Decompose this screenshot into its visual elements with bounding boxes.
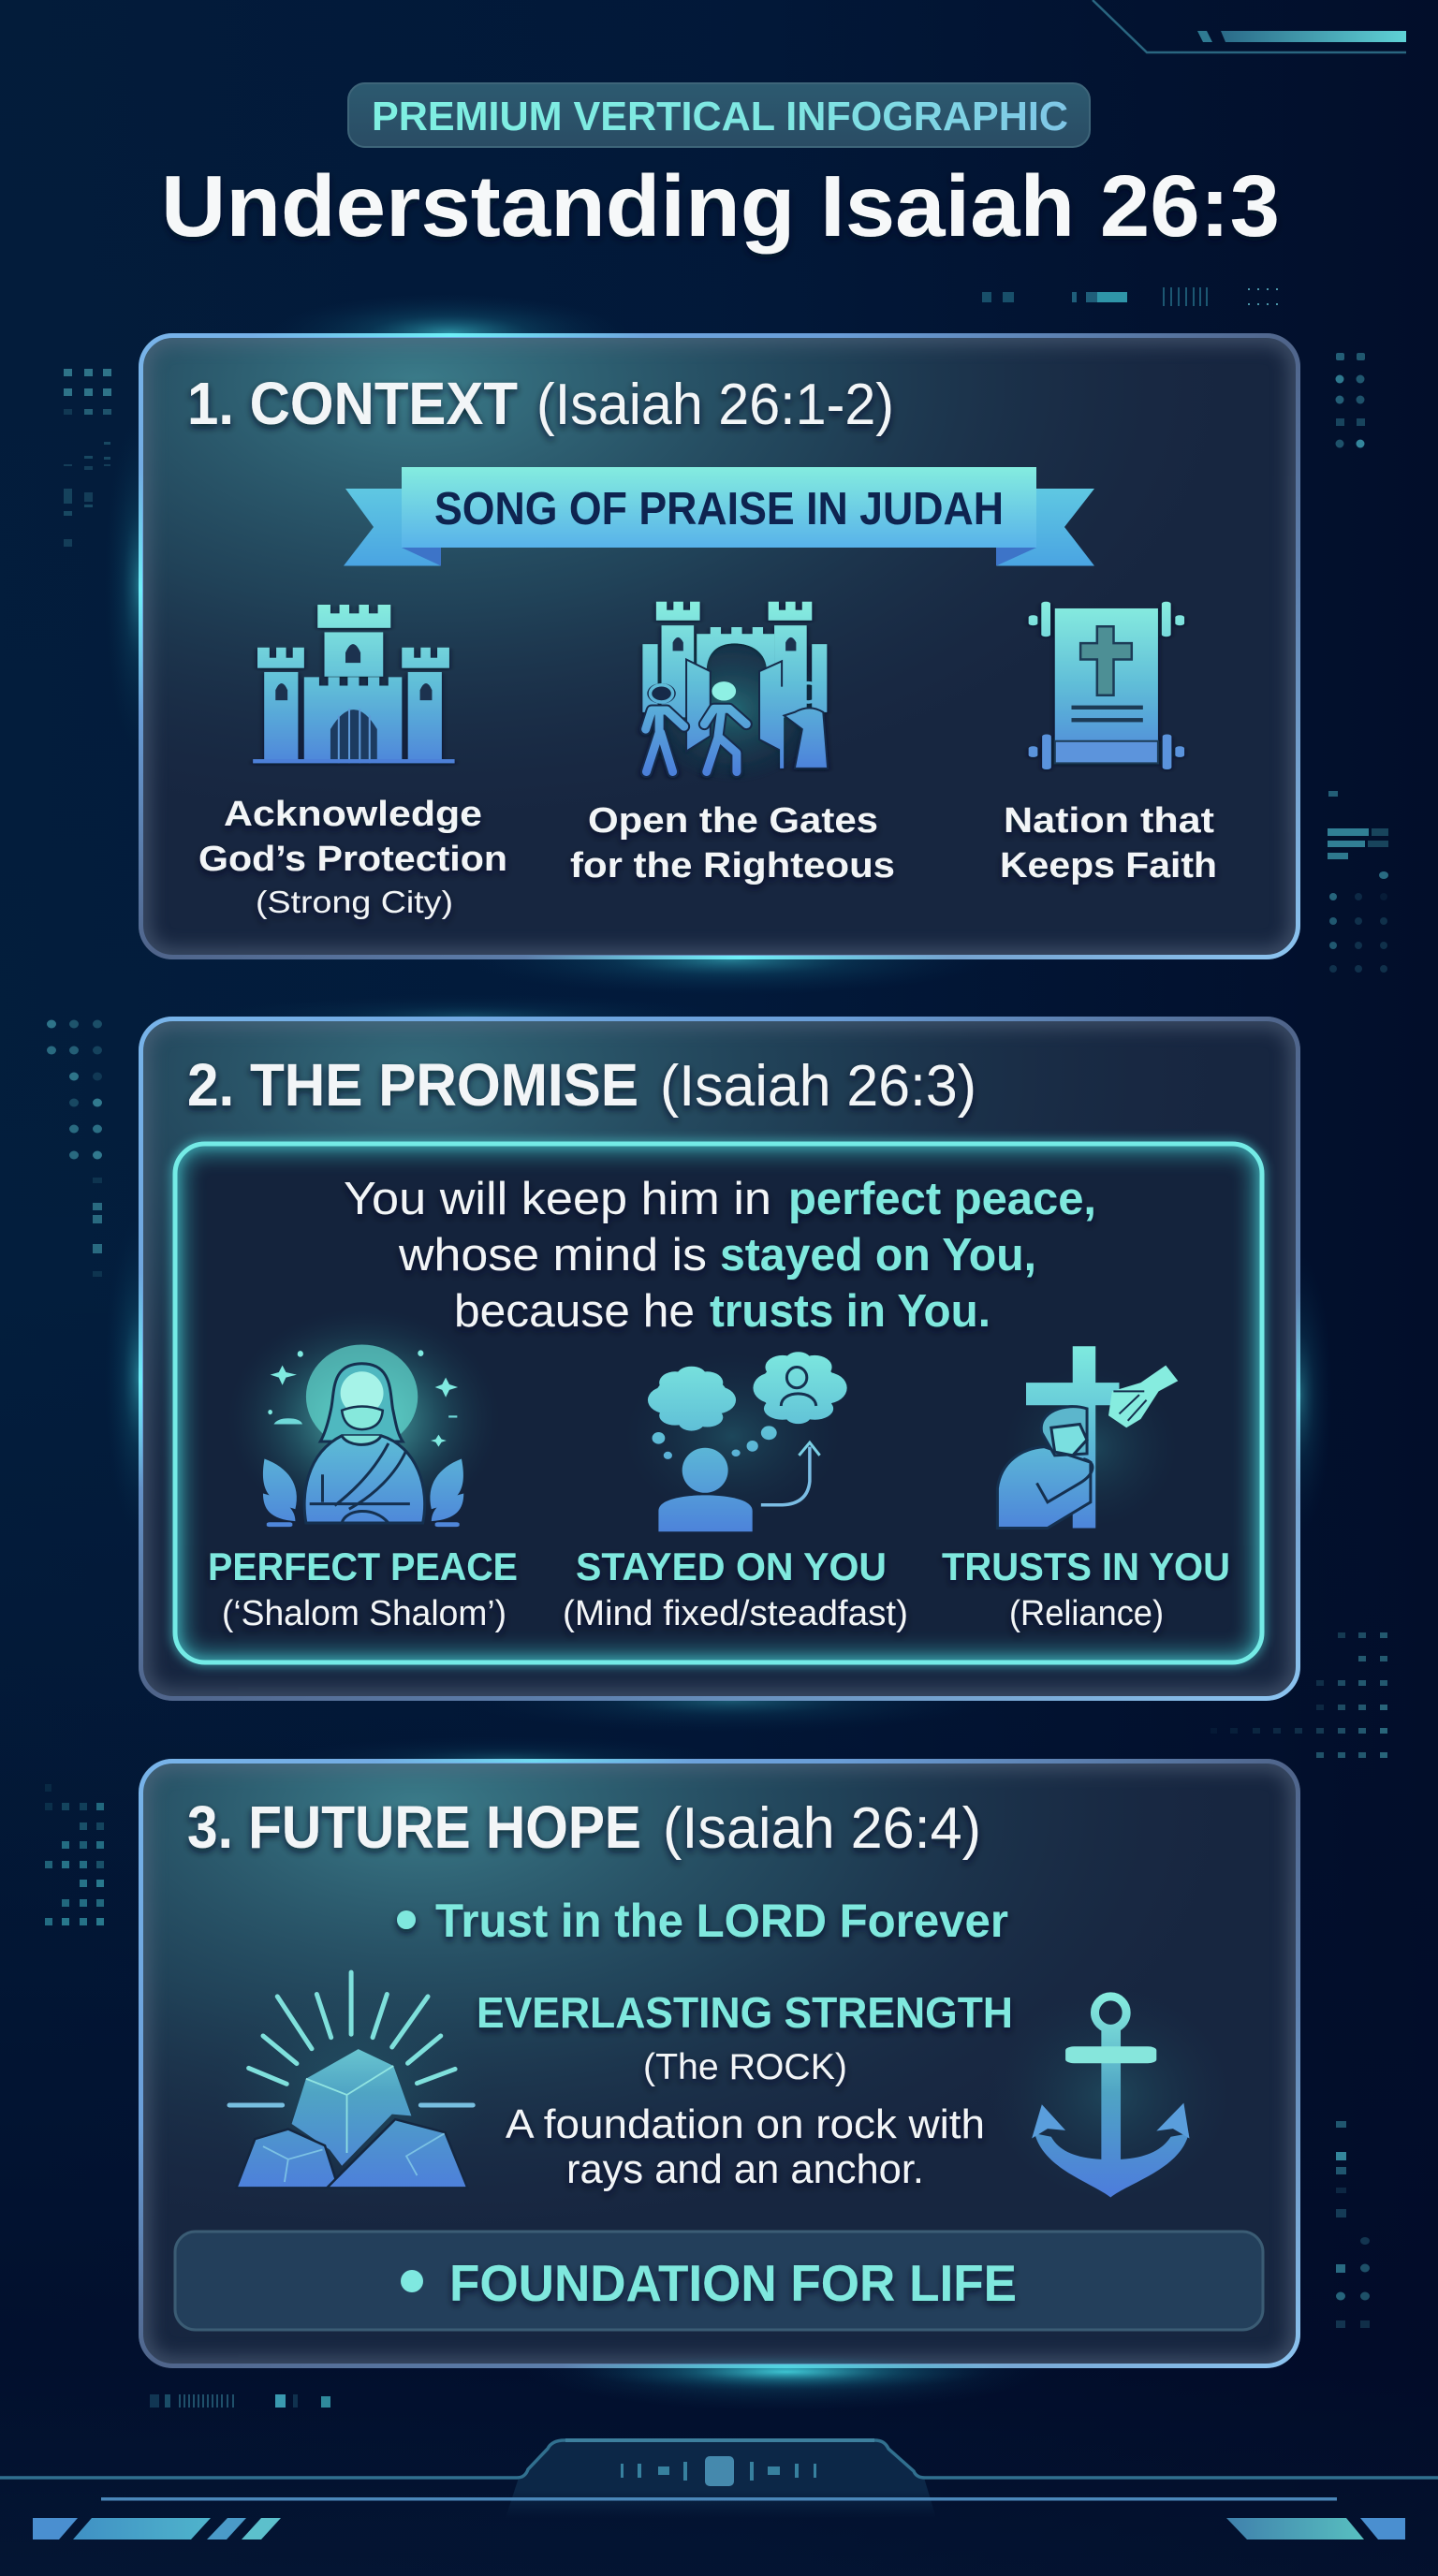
panel: 1. context [139,333,1300,959]
right lower dot grid decoration [1211,1632,1387,1758]
bullet: trust in the lord forever: Trust in the LORD Forever [435,1895,1008,1947]
labels: trusts in you: TRUSTS IN YOU [942,1544,1230,1588]
labels: perfect peace: PERFECT PEACE [208,1544,518,1588]
label: acknowledge gods protection: Acknowledge [224,795,482,834]
icon: scroll with cross [1029,602,1184,769]
icon: trusts in you praying at cross [997,1346,1178,1529]
label: nation that keeps faith: Keeps Faith [1000,846,1217,886]
right top dot decoration [1335,353,1365,447]
foundation for life bar [175,2232,1263,2330]
label: acknowledge gods protection [198,795,507,919]
icon: jesus perfect peace [227,1309,500,1530]
heading: 1. context [187,370,894,437]
label: open the gates: for the Righteous [570,846,895,886]
heading: 2. the promise: 2. THE PROMISE [187,1051,638,1119]
icon: rock with rays [215,1972,488,2202]
label: nation that keeps faith: Nation that [1004,801,1214,841]
label: open the gates: Open the Gates [588,801,878,841]
foundation for life bar: FOUNDATION FOR LIFE [449,2254,1017,2312]
label: acknowledge gods protection: God’s Protection [198,840,507,879]
bottom right accent bars [1226,2518,1405,2539]
icon: stayed on you thought clouds [624,1352,847,1531]
left lower dot decoration [45,1784,104,1925]
verse box [175,1144,1262,1662]
icon: anchor [989,1988,1232,2202]
text: everlasting strength: A foundation on rock with [506,2101,985,2147]
labels: stayed on you: (Mind fixed/steadfast) [563,1594,908,1633]
title: Understanding Isaiah 26:3 [161,157,1280,255]
labels: trusts in you [942,1544,1230,1633]
header tick decoration [982,287,1278,306]
labels: perfect peace [208,1544,518,1633]
header pill: PREMIUM VERTICAL INFOGRAPHIC [372,94,1068,139]
top right corner decoration [1093,0,1406,52]
text: everlasting strength: (The ROCK) [643,2047,847,2087]
text: everlasting strength: rays and an anchor. [566,2146,924,2192]
ribbon banner: SONG OF PRAISE IN JUDAH [434,484,1004,534]
heading: 2. the promise: (Isaiah 26:3) [660,1054,976,1119]
right middle bars and dots decoration [1328,791,1388,973]
left top dot decoration [64,369,111,547]
heading: 3. future hope [187,1793,981,1861]
verse text: trusts in You. [710,1286,990,1337]
right bottom dot decoration [1336,2121,1370,2328]
label: open the gates [570,801,895,886]
panel glows behind cards [105,294,1332,2411]
verse text: You will keep him in [344,1174,771,1224]
heading: 3. future hope: 3. FUTURE HOPE [187,1793,641,1861]
heading: 2. the promise [187,1051,976,1119]
bottom console frame [0,2440,1438,2518]
icon: open gates with people [642,602,828,783]
verse text: because he [454,1286,695,1337]
bottom glow over panel 3 edge [580,2353,992,2391]
labels: stayed on you: STAYED ON YOU [576,1544,887,1588]
panel: 3. future hope [139,1759,1300,2368]
label: nation that keeps faith [1000,801,1217,886]
left middle dot decoration [47,1020,102,1277]
text: everlasting strength [477,1988,1013,2192]
bottom left accent bars [33,2518,281,2539]
panel: 2. the promise [139,1017,1300,1701]
header pill [348,83,1090,147]
icon: castle [253,605,455,763]
verse text: whose mind is [398,1230,707,1281]
labels: trusts in you: (Reliance) [1009,1594,1164,1633]
text: everlasting strength: EVERLASTING STRENGTH [477,1988,1013,2037]
verse text: stayed on You, [720,1230,1036,1281]
heading: 1. context: 1. CONTEXT [187,370,518,437]
verse text [344,1174,1096,1337]
label: acknowledge gods protection: (Strong City) [256,885,453,919]
heading: 3. future hope: (Isaiah 26:4) [663,1796,981,1861]
labels: perfect peace: (‘Shalom Shalom’) [222,1594,506,1633]
verse text: perfect peace, [788,1174,1096,1224]
labels: stayed on you [563,1544,908,1633]
ribbon banner [344,467,1094,565]
bottom left tick decoration [150,2394,330,2408]
heading: 1. context: (Isaiah 26:1-2) [536,373,894,437]
